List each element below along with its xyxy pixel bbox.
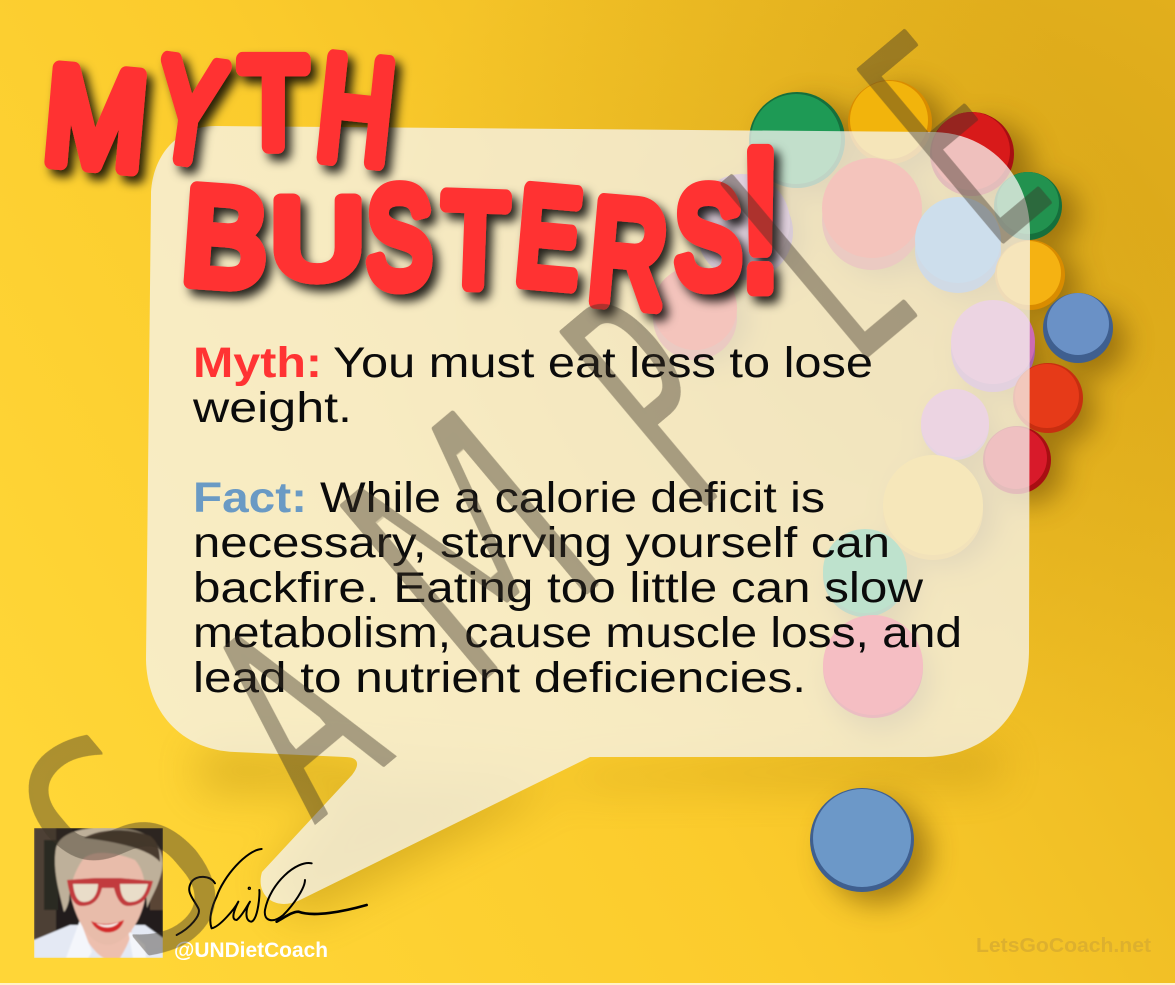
bubble drop shadow — [200, 750, 1000, 920]
disc: green top — [749, 92, 845, 188]
title line: BUSTERS!: S — [367, 161, 431, 315]
SAMPLE watermark: M — [277, 343, 669, 756]
disc: red lower — [983, 426, 1051, 494]
coloured wooden discs — [653, 80, 1126, 904]
SAMPLE watermark: A — [153, 563, 440, 876]
disc shadows — [663, 88, 1126, 904]
fact text: necessary, starving yourself can — [193, 519, 890, 567]
portrait photo — [34, 828, 163, 958]
fact text: backfire. Eating too little can slow — [193, 564, 924, 612]
disc: teal — [823, 529, 907, 617]
handle: @UNDietCoach: @UNDietCoach — [174, 939, 328, 962]
SAMPLE watermark: L — [667, 90, 968, 427]
signature — [177, 849, 367, 935]
title line: MYTH: H — [311, 25, 401, 195]
myth text: Myth: — [193, 339, 322, 387]
title line: BUSTERS!: B — [178, 158, 272, 316]
fact text: lead to nutrient deficiencies. — [193, 654, 806, 702]
disc: salmon behind text — [653, 266, 737, 360]
disc: blue right — [1043, 293, 1113, 363]
shirt and neck — [34, 920, 163, 958]
lenses — [73, 884, 148, 902]
fact text: While a calorie deficit is — [320, 474, 825, 522]
website: LetsGoCoach.net: LetsGoCoach.net — [976, 935, 1151, 957]
disc: orange red — [1013, 363, 1083, 433]
hair dark streak — [84, 830, 160, 862]
SAMPLE watermark: P — [506, 234, 812, 575]
title line: BUSTERS! — [178, 109, 782, 337]
title line: MYTH: T — [240, 32, 307, 173]
title line: BUSTERS!: U — [271, 176, 364, 301]
myth text: weight. — [192, 384, 352, 432]
disc: red top — [930, 112, 1014, 196]
smile — [91, 920, 124, 933]
fact text: metabolism, cause muscle loss, and — [193, 609, 962, 657]
title line: BUSTERS!: S — [675, 160, 741, 315]
title line: BUSTERS!: E — [511, 161, 586, 315]
disc: blue lower — [810, 788, 914, 892]
face — [70, 852, 146, 934]
myth text: You must eat less to lose — [333, 339, 873, 387]
disc: pale yellow — [883, 455, 983, 560]
fact text — [193, 474, 962, 702]
disc: orchid small — [921, 389, 989, 460]
title line: MYTH: Y — [147, 30, 232, 193]
fact text: Fact: — [193, 474, 307, 522]
hair — [55, 828, 162, 912]
speech bubble panel — [146, 126, 1030, 904]
myth text — [192, 339, 873, 432]
disc: pale blue large — [915, 197, 1001, 293]
disc: amber right — [995, 240, 1065, 310]
title line: BUSTERS!: R — [583, 169, 673, 337]
disc: yellow top — [848, 80, 932, 164]
glasses — [67, 878, 153, 906]
photo backdrop — [34, 828, 163, 940]
disc: pink lower — [823, 615, 923, 718]
title line: BUSTERS!: T — [440, 167, 509, 313]
disc: salmon large — [822, 158, 922, 270]
title line: MYTH: M — [38, 39, 153, 199]
title line: BUSTERS!: ! — [739, 109, 782, 331]
disc: orchid — [951, 300, 1035, 392]
title line: MYTH — [38, 25, 401, 199]
body copy — [192, 339, 962, 702]
disc: green right — [994, 172, 1062, 240]
title: MYTH BUSTERS! — [38, 25, 782, 337]
disc: purple behind title — [694, 174, 793, 280]
